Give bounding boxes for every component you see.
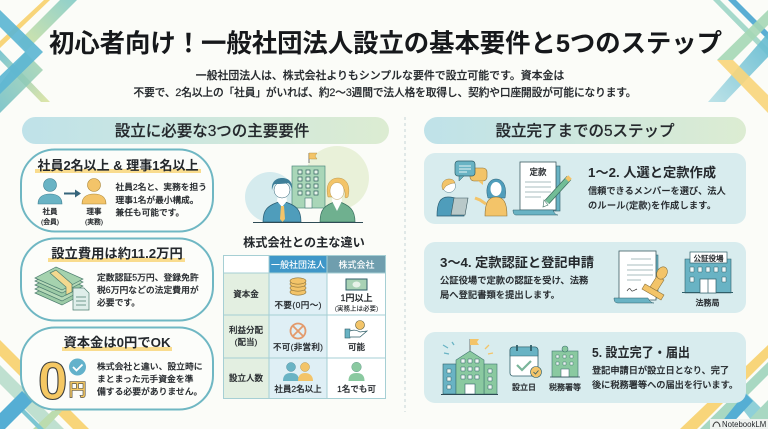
- row labels: 利益分配: [229, 325, 263, 335]
- cell text: 1名でも可: [337, 384, 376, 394]
- panel: zero capital: [21, 328, 213, 411]
- heading: capital: 資本金は0円でOK: [63, 334, 171, 350]
- icon: two people talking: [437, 161, 507, 216]
- icon: zero yen: 円: [68, 380, 86, 400]
- text: step 3-4: 公証役場で定款の認証を受け、法務: [440, 274, 589, 286]
- icon: banknote: [346, 279, 367, 290]
- panel: step 5: [424, 332, 746, 403]
- panel: step 3-4: [424, 242, 746, 313]
- divider: [404, 117, 406, 412]
- text: capital: [97, 360, 203, 396]
- text: capital: 備する必要がありません。: [97, 386, 202, 396]
- text: cost: 必要です。: [97, 296, 140, 308]
- heading: cost: 設立費用は約11.2万円: [51, 245, 183, 261]
- icon: member to director: 社員: [42, 206, 58, 216]
- panel: setup cost: [21, 238, 213, 320]
- decoration: top-right corner: [708, 0, 768, 113]
- heading: members: 社員2名以上 & 理事1名以上: [37, 158, 199, 173]
- badge: NotebookLM: [710, 419, 768, 429]
- text: members: 社員2名と、実務を担う: [116, 181, 207, 192]
- icon: coins: [290, 278, 306, 295]
- heading: left section: [22, 117, 389, 144]
- decoration: bottom-right corner: [680, 345, 768, 429]
- badge: NotebookLM: NotebookLM: [722, 420, 766, 429]
- text: cost: 税6万円などの法定費用が: [97, 284, 199, 295]
- decoration: top-left corner: [0, 0, 77, 113]
- text: step 1-2: 1〜2. 人選と定款作成: [588, 164, 716, 180]
- row labels: (配当): [235, 337, 257, 347]
- text: capital: まとまった元手資金を準: [97, 373, 194, 384]
- text: cost: [97, 272, 199, 308]
- icon: stamped document: [614, 251, 670, 303]
- icon: money and document: [35, 267, 89, 310]
- title: 初心者向け！一般社団法人設立の基本要件と5つのステップ: [49, 30, 722, 58]
- text: members: 兼任も可能です。: [116, 206, 184, 218]
- illustration: people and building: [245, 146, 369, 222]
- row labels: [229, 289, 263, 383]
- icon: hand with coin: [345, 320, 367, 338]
- icon: notary office: 公証役場: [694, 253, 724, 263]
- row labels: 資本金: [233, 289, 259, 299]
- panel: members and directors: [21, 150, 213, 232]
- text: step 3-4: [440, 254, 594, 300]
- icon: tax office: [549, 346, 581, 392]
- text: members: [116, 181, 207, 218]
- cell text: 1円以上: [340, 293, 373, 303]
- intro text: 不要で、2名以上の「社員」がいれば、約2〜3週間で法人格を取得し、契約や口座開設が可能になります。: [134, 86, 636, 99]
- text: cost: 定数認証5万円、登録免許: [97, 272, 199, 282]
- icon: member to director: (会員): [41, 217, 59, 226]
- cell text: [273, 293, 378, 394]
- text: step 3-4: 局へ登記書類を提出します。: [440, 289, 560, 300]
- cell text: 社員2名以上: [274, 384, 322, 394]
- text: step 1-2: 信頼できるメンバーを選び、法人: [588, 185, 726, 196]
- row labels: 設立人数: [229, 373, 263, 383]
- cell text: 可能: [348, 342, 365, 352]
- icon: member to director: (実務): [85, 217, 103, 226]
- table header: 株式会社: [338, 259, 375, 270]
- icon: tax office: 税務署等: [549, 382, 581, 392]
- table header: 一般社団法人: [271, 259, 325, 270]
- icon: notary office: 法務局: [696, 298, 720, 308]
- intro text: [134, 68, 636, 99]
- cell text: (実務上は必要): [335, 304, 378, 312]
- table: comparison: [223, 255, 386, 399]
- icon: one person: [348, 362, 364, 381]
- cell text: 不可(非営利): [273, 342, 323, 352]
- heading: left section: 設立に必要な3つの主要要件: [115, 122, 309, 140]
- cell text: 不要(0円〜): [274, 300, 322, 310]
- heading: right section: [424, 117, 746, 144]
- text: step 3-4: 3〜4. 定款認証と登記申請: [440, 254, 594, 270]
- icon: completed building: [441, 339, 498, 394]
- text: step 5: [592, 344, 738, 390]
- intro text: 一般社団法人は、株式会社よりもシンプルな要件で設立可能です。資本金は: [196, 68, 564, 82]
- icon: zero yen: 0: [38, 352, 67, 411]
- text: step 5: 5. 設立完了・届出: [592, 344, 690, 360]
- icon: calendar: 設立日: [512, 382, 536, 392]
- text: step 5: 登記申請日が設立日となり、完了: [592, 364, 729, 376]
- icon: member to director: 理事: [86, 206, 102, 216]
- icon: notary office: [682, 252, 733, 308]
- icon: prohibited: [290, 324, 306, 338]
- text: members: 理事1名が最小構成。: [116, 194, 199, 205]
- icon: articles document and pen: [513, 162, 570, 215]
- text: step 1-2: のルール(定款)を作成します。: [588, 200, 716, 210]
- table header: [271, 259, 375, 270]
- icon: member to director: [38, 178, 106, 226]
- panel: step 1-2: [424, 153, 746, 224]
- heading: right section: 設立完了までの5ステップ: [495, 122, 675, 140]
- decoration: bottom-left corner: [0, 340, 89, 429]
- text: capital: 株式会社と違い、設立時に: [97, 360, 203, 372]
- icon: two people: [283, 362, 313, 381]
- text: step 5: 後に税務署等への届出を行います。: [592, 379, 738, 390]
- text: step 1-2: [588, 164, 726, 210]
- icon: articles document and pen: 定款: [529, 167, 547, 177]
- heading: comparison: 株式会社との主な違い: [243, 234, 365, 250]
- icon: calendar: [510, 345, 542, 392]
- icon: zero yen: [38, 352, 86, 411]
